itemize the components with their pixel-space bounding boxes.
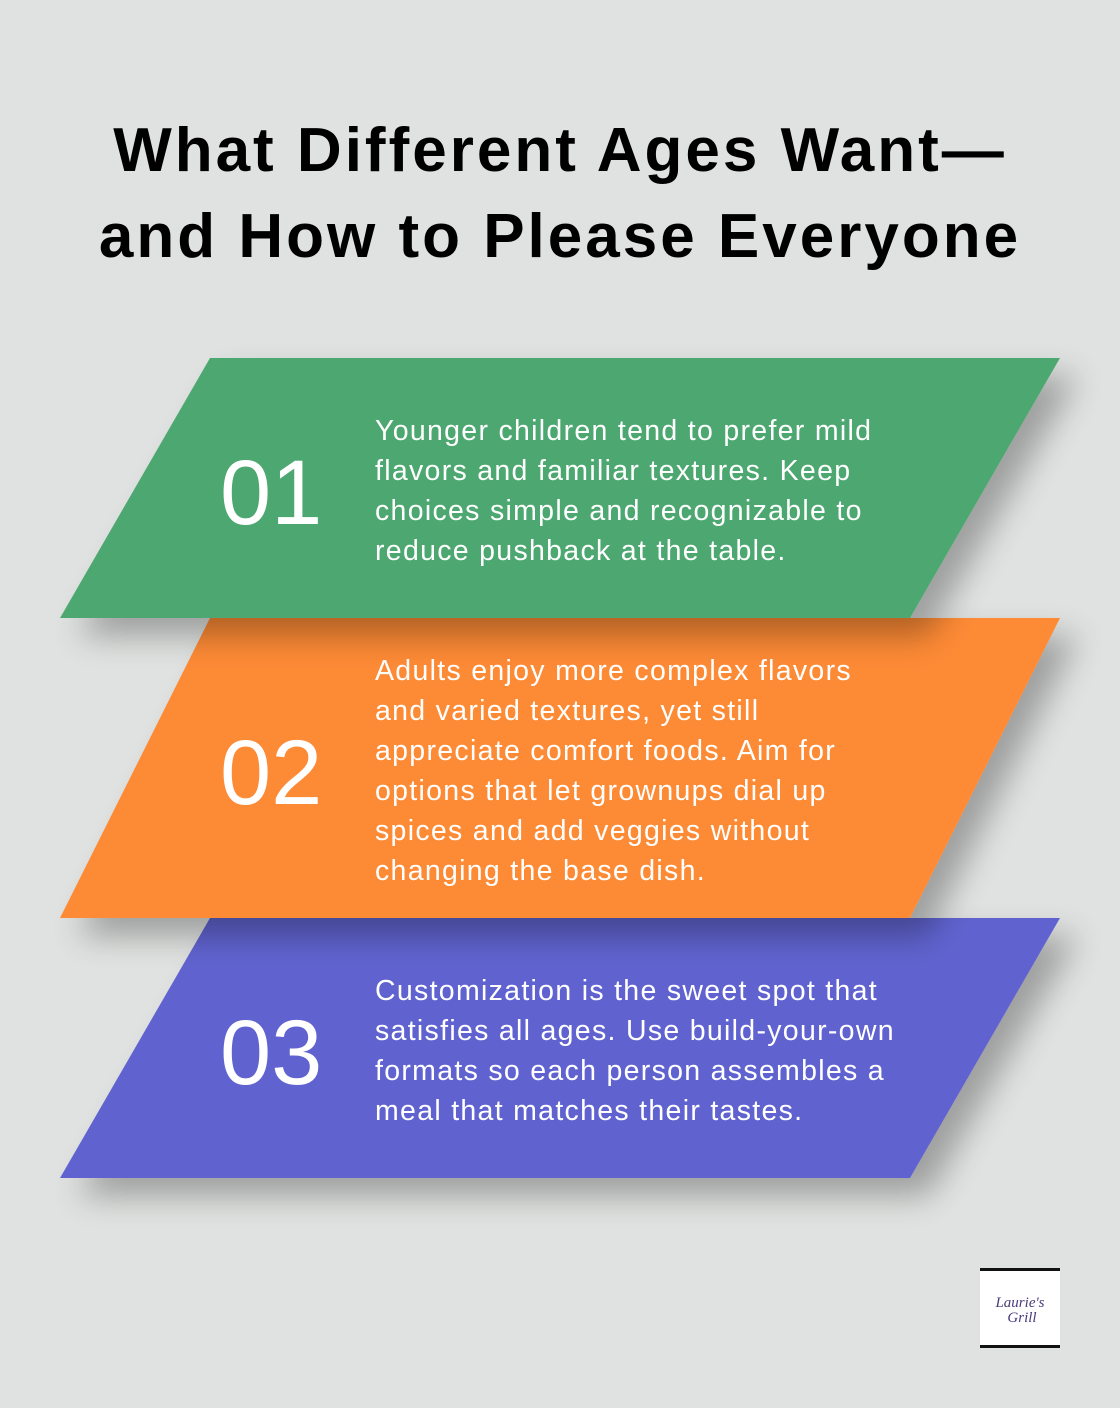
panel: 02: appreciate comfort foods. Aim for: [375, 735, 836, 767]
panel: 01: flavors and familiar textures. Keep: [375, 455, 851, 487]
panel: 01: reduce pushback at the table.: [375, 535, 787, 567]
panel: 03: [60, 918, 1060, 1178]
panel: 02: Adults enjoy more complex flavors: [375, 655, 852, 687]
panel: 03: 03: [220, 1002, 322, 1104]
panel: 01: choices simple and recognizable to: [375, 495, 863, 527]
panel: 02: options that let grownups dial up: [375, 775, 827, 807]
panel: 03: meal that matches their tastes.: [375, 1095, 803, 1127]
panel: 02: and varied textures, yet still: [375, 695, 759, 727]
panel: 02: 02: [220, 722, 322, 824]
panel: 01: Younger children tend to prefer mild: [375, 415, 872, 447]
logo: [980, 1268, 1060, 1348]
panel: 03: Customization is the sweet spot that: [375, 975, 878, 1007]
logo: Laurie's: [994, 1295, 1045, 1311]
panel: 03: formats so each person assembles a: [375, 1055, 885, 1087]
panel: 03: satisfies all ages. Use build-your-own: [375, 1015, 895, 1047]
panel: 01: [60, 358, 1060, 618]
panel: 02: spices and add veggies without: [375, 815, 810, 847]
panel: 02: changing the base dish.: [375, 855, 706, 887]
title: and How to Please Everyone: [99, 202, 1021, 271]
title: [99, 116, 1021, 271]
logo: Grill: [1007, 1310, 1037, 1326]
title: What Different Ages Want—: [113, 116, 1007, 185]
panel: 01: 01: [220, 442, 322, 544]
panel: 02: [60, 618, 1060, 918]
